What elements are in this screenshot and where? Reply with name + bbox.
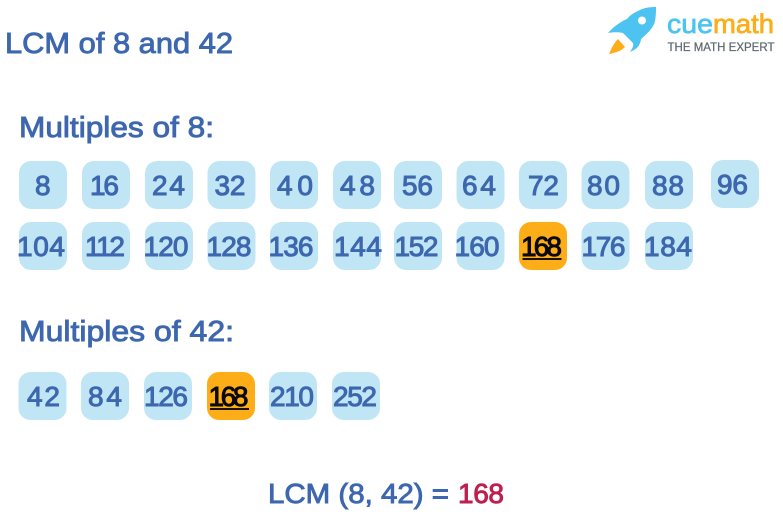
row: multiples of 8, first row: 40	[277, 170, 313, 201]
row: multiples of 8, second row	[17, 222, 693, 270]
row: multiples of 8, first row: 96	[717, 169, 748, 200]
row: multiples of 8, first row: 48	[340, 170, 375, 201]
result: LCM equation: 168	[458, 478, 504, 509]
row: multiples of 42	[18, 372, 380, 420]
row: multiples of 8, second row: 152	[394, 231, 438, 262]
row: multiples of 8, first row: 72	[528, 170, 559, 201]
row: multiples of 8, second row: 128	[206, 231, 252, 262]
heading: multiples of 42: Multiples of 42:	[19, 316, 234, 348]
row: multiples of 42: 42	[27, 381, 60, 412]
row: multiples of 8, first row: 64	[462, 170, 496, 201]
row: multiples of 8, second row: 104	[17, 231, 65, 262]
row: multiples of 8, second row: 120	[144, 231, 188, 262]
row: multiples of 8, first row: 56	[402, 170, 433, 201]
row: multiples of 8, first row: 8	[35, 170, 51, 201]
row: multiples of 8, second row: 112	[85, 231, 125, 262]
highlight: 168	[207, 372, 255, 420]
wordmark: cue	[667, 9, 713, 39]
logo: cuemath: math	[713, 9, 774, 39]
row: multiples of 8, first row: 32	[214, 170, 246, 201]
icon: rocket	[608, 7, 656, 54]
row: multiples of 8, first row: 88	[652, 170, 684, 201]
row: multiples of 8, second row: 160	[454, 231, 500, 262]
row: multiples of 8, first row: 80	[587, 170, 620, 201]
row: multiples of 42: 84	[88, 381, 122, 412]
row: multiples of 8, first row: 24	[152, 170, 185, 201]
highlight: 168: 168	[208, 381, 248, 412]
row: multiples of 8, second row: 184	[644, 231, 692, 262]
row: multiples of 42: 252	[333, 381, 377, 412]
result: LCM equation: LCM (8, 42) =	[268, 478, 449, 509]
heading: multiples of 8: Multiples of 8:	[19, 112, 214, 144]
row: multiples of 8, second row: 136	[268, 231, 314, 262]
row: multiples of 42: 210	[270, 381, 314, 412]
row: multiples of 42: 126	[144, 381, 188, 412]
logo: cuemath	[608, 7, 775, 54]
row: multiples of 8, second row: 144	[334, 231, 382, 262]
title: LCM of 8 and 42	[5, 28, 233, 60]
highlight: 168	[519, 222, 567, 270]
row: multiples of 8, first row	[19, 160, 759, 209]
row: multiples of 8, first row: 16	[90, 170, 119, 201]
tagline: THE MATH EXPERT	[668, 40, 775, 54]
row: multiples of 8, second row: 176	[582, 231, 626, 262]
highlight: 168: 168	[521, 231, 562, 262]
